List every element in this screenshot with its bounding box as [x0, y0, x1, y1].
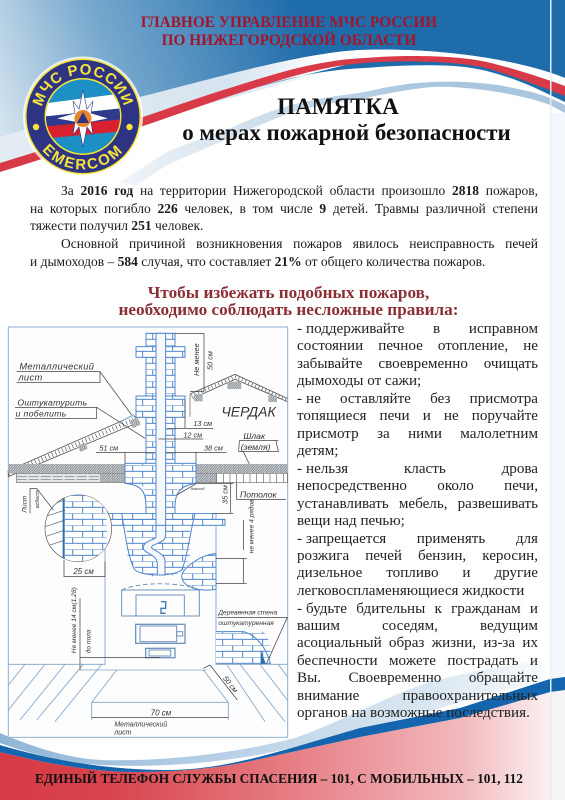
rule 3: непосредственно около печи, — [297, 478, 538, 494]
diagram labels: лист — [113, 730, 132, 737]
diagram labels: 12 см — [183, 430, 202, 439]
rule 4: - — [297, 530, 302, 546]
intro text block: За 2016 год на территории Нижегородской области произошло 2818 пожаров, — [61, 183, 538, 198]
second blue stripe — [250, 60, 565, 102]
rule 4: легковоспламеняющиеся жидкости — [297, 583, 524, 599]
diagram labels: 50 см — [206, 351, 215, 370]
diagram labels: до пола — [85, 629, 93, 653]
rule 5: беспечности можете пострадать и — [297, 653, 538, 669]
rule 5 — [297, 600, 538, 721]
diagram labels: Не менее 14 см(1,28) — [71, 587, 78, 653]
header organisation title: ГЛАВНОЕ УПРАВЛЕНИЕ МЧС РОССИИ — [141, 14, 437, 31]
rule 2: присмотр за ними малолетним — [297, 426, 538, 442]
rule 5: органов на возможные последствия. — [297, 705, 530, 721]
rule 4 — [297, 530, 538, 599]
rule 3: вещи над печью; — [297, 513, 405, 529]
intro text block: и дымоходов – 584 случая, что составляет 21% от общего количества пожаров. — [30, 254, 485, 268]
rules list — [297, 321, 538, 721]
diagram labels: (земля) — [241, 442, 271, 452]
rule 2: - — [297, 391, 302, 407]
rule 1: - — [297, 321, 302, 337]
red stripe — [0, 56, 565, 172]
intro text block — [30, 183, 538, 269]
dimension lines and leaders — [15, 333, 287, 718]
bottom right brick wall — [216, 632, 271, 664]
white stripe — [0, 50, 565, 168]
diagram labels: Деревянная стена — [217, 610, 278, 617]
left roof — [8, 415, 141, 477]
diagram labels: 50 см — [221, 674, 240, 694]
rule 1: дымоходы от сажи; — [297, 373, 421, 389]
light blue swoosh — [120, 82, 565, 186]
rule 3: устанавливать мебель, развешивать — [297, 496, 538, 512]
diagram labels: 70 см — [151, 708, 172, 717]
floor and hatching — [8, 664, 287, 722]
rule 4: розжига печей бензин, керосин, — [297, 548, 538, 564]
intro text block: Основной причиной возникновения пожаров явилось неисправность печей — [61, 236, 538, 251]
header organisation title: ПО НИЖЕГОРОДСКОЙ ОБЛАСТИ — [162, 32, 416, 49]
top blue band — [0, 0, 565, 137]
diagram labels: 25 см — [72, 567, 94, 576]
diagram labels — [16, 343, 278, 737]
rule 5: внимание правоохранительных — [297, 688, 538, 704]
header organisation title — [141, 14, 437, 49]
rule 2: детям; — [297, 443, 338, 459]
rule 3 — [297, 461, 538, 529]
section heading — [118, 283, 458, 318]
rule 5: Вы. Своевременно обращайте — [297, 670, 538, 686]
stove doors — [122, 584, 200, 658]
vertical strip line — [550, 0, 552, 800]
rule 3: - — [297, 461, 302, 477]
side brick niche right — [182, 553, 216, 590]
section heading: Чтобы избежать подобных пожаров, — [148, 283, 429, 302]
brick chimney — [97, 333, 225, 540]
rule 5: будьте бдительны к гражданам и — [306, 600, 538, 616]
rule 1: поддерживайте в исправном — [306, 321, 538, 337]
bottom red band — [0, 692, 565, 800]
subtitle: о мерах пожарной безопасности — [182, 120, 511, 145]
main title: ПАМЯТКА — [277, 94, 399, 119]
diagram frame — [8, 327, 288, 737]
bottom blue stripe — [0, 677, 565, 772]
rule 2 — [297, 391, 538, 459]
rule 5: - — [297, 600, 302, 616]
diagram labels: 13 см — [193, 419, 212, 428]
diagram labels: лист — [17, 373, 43, 383]
diagram labels: 35 см — [220, 485, 229, 504]
diagram labels: оштукатуренная — [218, 620, 274, 627]
section heading: необходимо соблюдать несложные правила: — [118, 300, 458, 318]
pale right strip — [552, 113, 565, 678]
diagram labels: Металлический — [19, 361, 94, 371]
diagram labels: Шлак — [243, 431, 266, 441]
rule 4: запрещается применять для — [306, 530, 538, 546]
diagram labels: дымоход — [191, 487, 204, 491]
rule 1 — [297, 321, 538, 389]
rule 1: состоянии печное отопление, не — [297, 338, 538, 354]
rule 4: дизельное топливо и другие — [297, 565, 538, 581]
rule 1: забывайте своевременно очищать — [297, 356, 538, 372]
intro text block: на которых погибло 226 человек, в том числе 9 детей. Травмы различной степени — [30, 200, 538, 216]
diagram labels: 51 см — [99, 444, 118, 453]
diagram labels: 38 см — [204, 444, 223, 453]
ceiling insulation — [8, 464, 287, 483]
logo: MChS Russia emblem: МЧС РОССИИ — [32, 64, 134, 106]
bottom light band — [0, 660, 545, 766]
footer emergency phone: ЕДИНЫЙ ТЕЛЕФОН СЛУЖБЫ СПАСЕНИЯ – 101, С МОБИЛЬНЫХ – 101, 112 — [35, 771, 523, 786]
diagram labels: Не менее — [192, 343, 201, 376]
diagram labels: Потолок — [240, 490, 278, 500]
logo: MChS Russia emblem — [23, 56, 143, 174]
rule 5: вашим соседям, ведущим — [297, 618, 538, 634]
side brick niche left — [45, 493, 112, 563]
diagram labels: ЧЕРДАК — [221, 404, 276, 420]
diagram labels: Оштукатурить — [17, 398, 88, 408]
rule 3: нельзя класть дрова — [306, 461, 538, 477]
intro text block: тяжести получил 251 человек. — [30, 218, 203, 233]
diagram labels: Металлический — [114, 721, 167, 729]
rule 5: асоциальный образ жизни, из-за их — [297, 635, 538, 651]
diagram labels: Лист — [22, 495, 29, 514]
diagram labels: не менее 4 рядов — [247, 499, 255, 553]
rule 2: не оставляйте без присмотра — [306, 391, 538, 407]
pale strip footer — [552, 690, 565, 800]
logo: MChS Russia emblem: EMERCOM — [42, 144, 122, 170]
rule 2: топящиеся печи и не поручайте — [297, 408, 538, 424]
right roof — [190, 374, 287, 417]
diagram labels: и побелить — [16, 409, 67, 419]
stove body — [105, 513, 216, 665]
stove diagram — [8, 326, 288, 738]
diagram labels: асбест — [35, 489, 41, 508]
